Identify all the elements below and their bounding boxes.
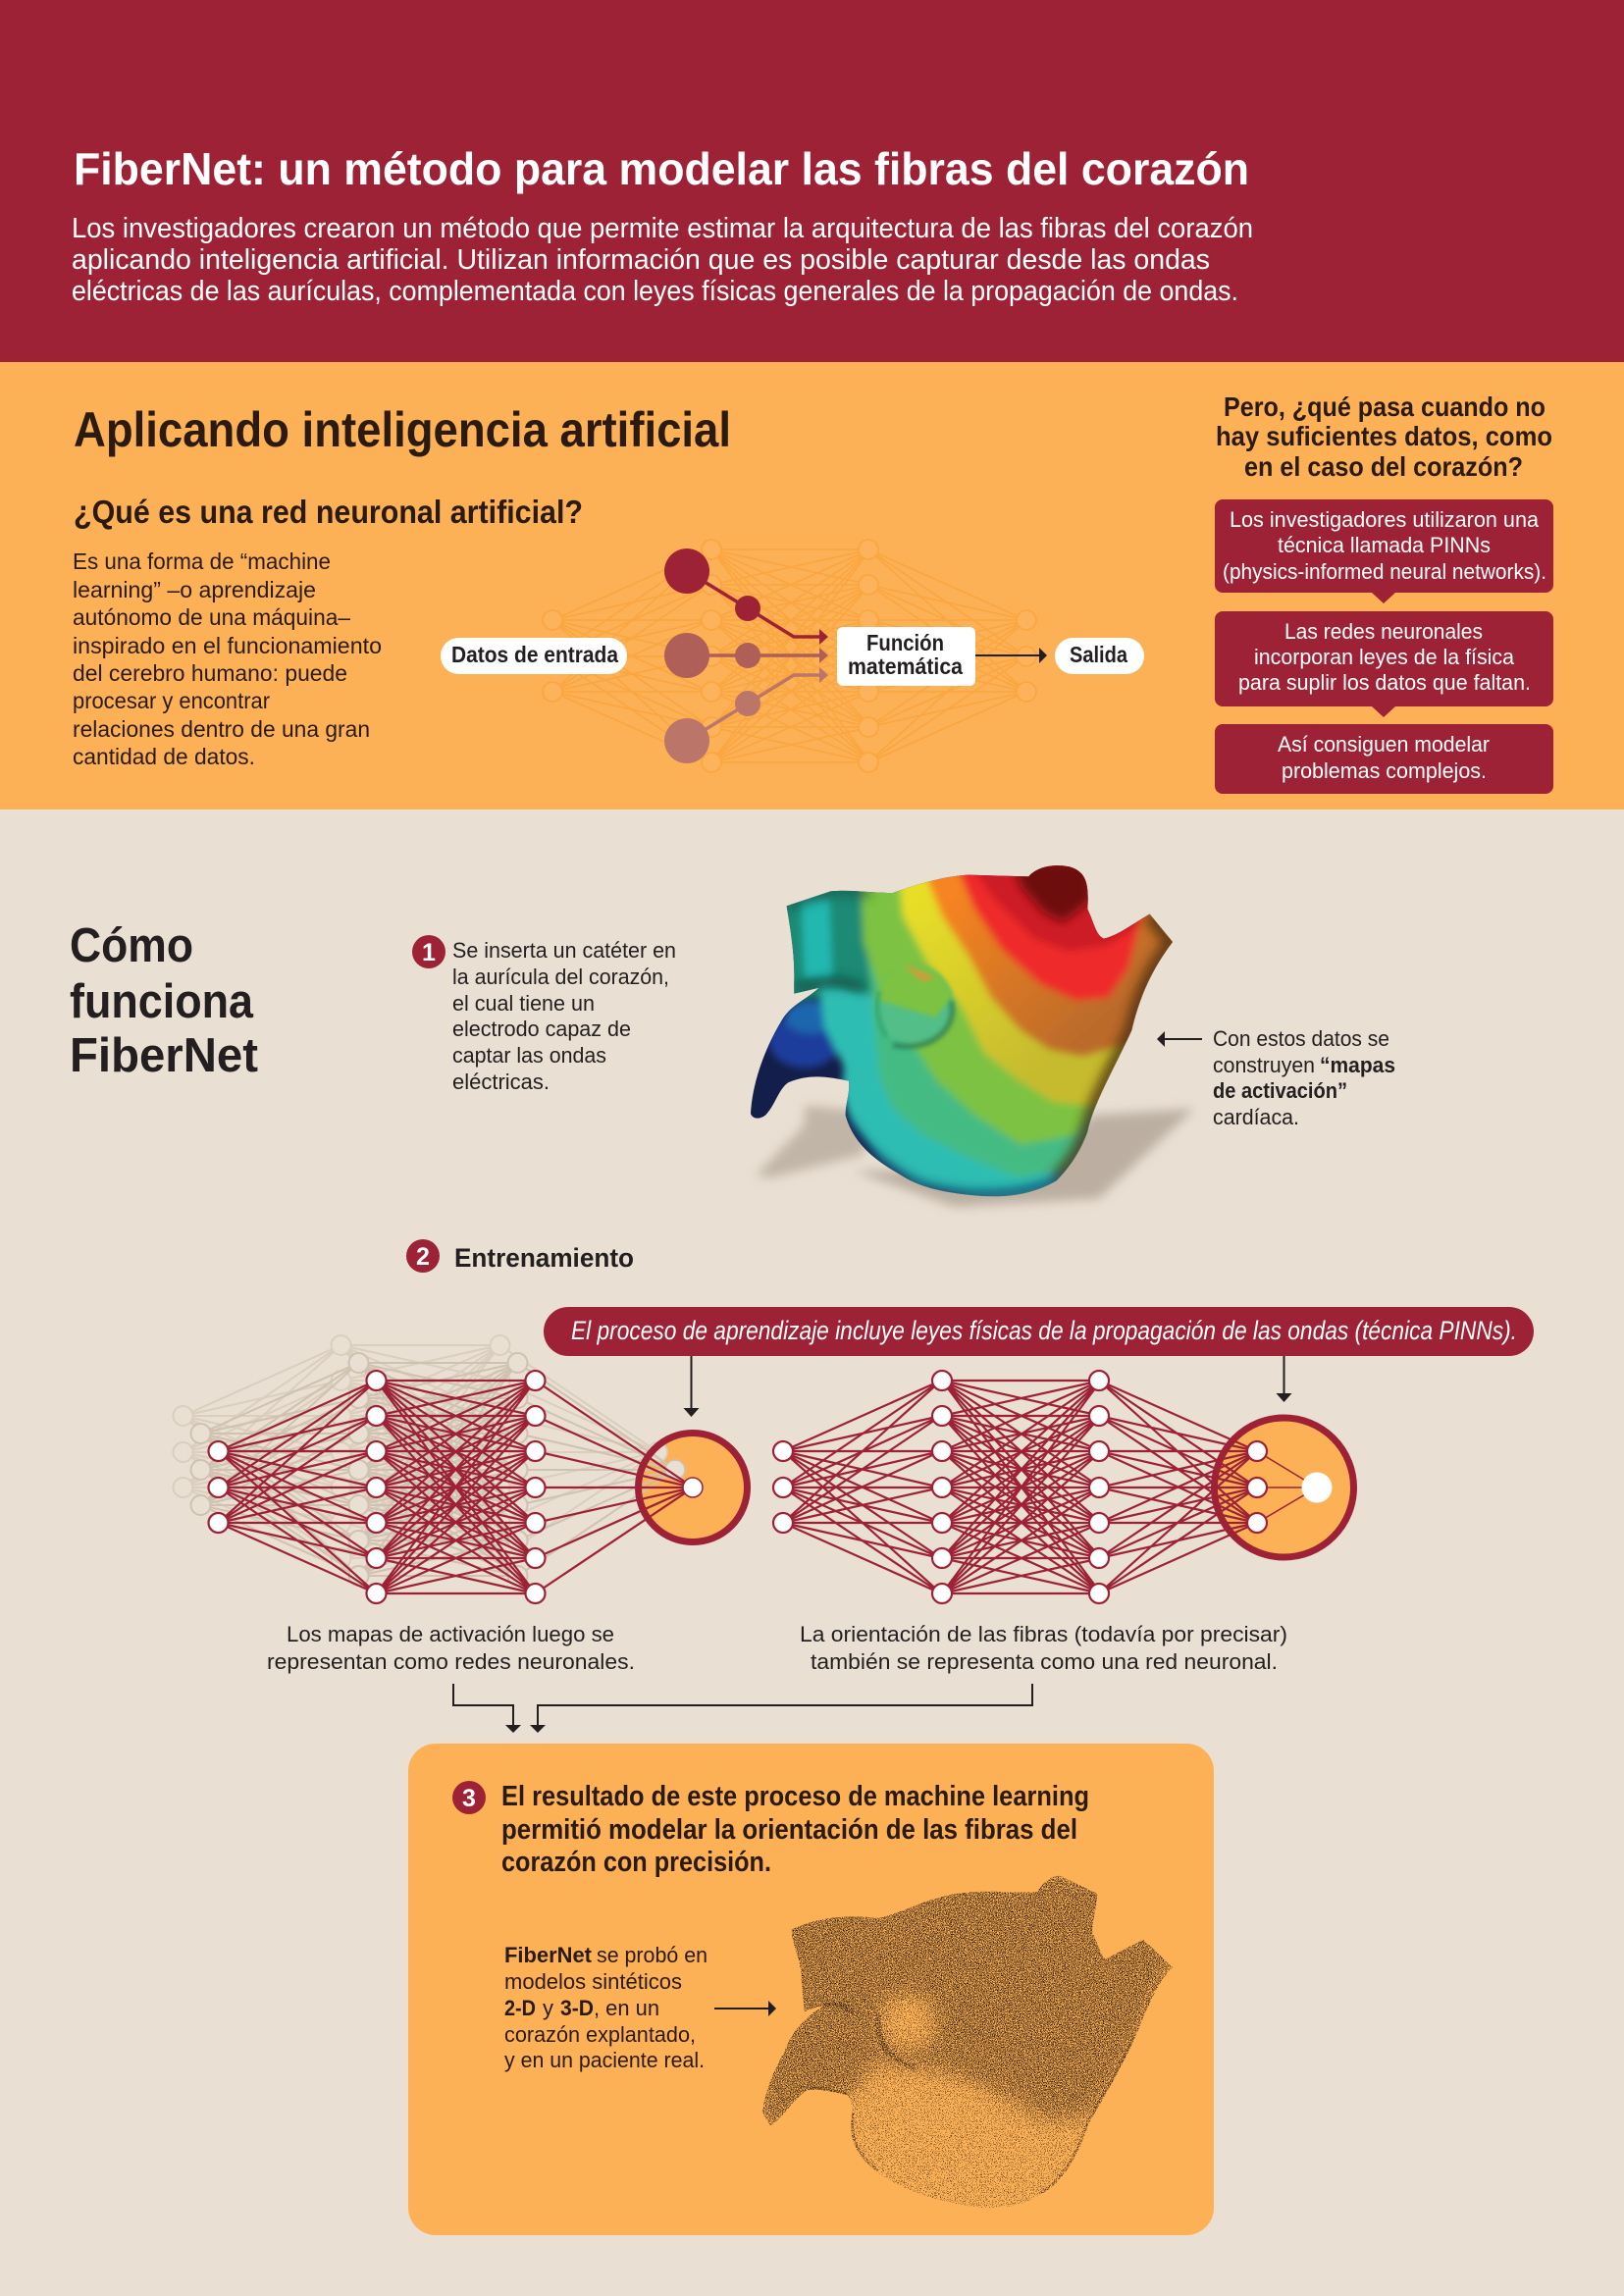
final node links [1257,1451,1317,1523]
label: Función matemática [837,627,975,686]
step 2 badge: 2 [416,1243,430,1271]
step 2 heading: Entrenamiento [454,1243,634,1273]
question heading: en el caso del corazón? [1244,451,1523,482]
label: Función matemática: matemática [848,653,963,679]
label: Función matemática: Función [866,630,944,655]
text: definition of neural network: autónomo de una máquina– [73,604,351,630]
highlighted signal path: top [664,548,828,645]
result side text: 2-D [504,1996,536,2020]
faint network [543,540,1036,772]
arrow: bubble to right circle [1276,1356,1291,1402]
result side text: modelos sintéticos [504,1969,682,1994]
intro text [72,213,1253,307]
step 1 text: la aurícula del corazón, [452,965,669,989]
step 1 text: captar las ondas [452,1043,606,1068]
image: activation map heart [739,844,1197,1210]
heading: Como funciona FiberNet: funciona [70,975,254,1028]
output circle [1215,1418,1354,1557]
panel: result [408,1744,1214,2235]
arrow: right caption to result [530,1684,1032,1733]
heading: Aplicando inteligencia artificial: Aplicando inteligencia artificial [74,402,731,457]
caption: right network: La orientación de las fibras (todavía por precisar) [800,1622,1287,1646]
result heading: permitió modelar la orientación de las fibras del [501,1814,1077,1846]
result side text: corazón explantado, [504,2022,696,2047]
panel: pero que pasa [1215,391,1553,794]
caption: left network: Los mapas de activación luego se [287,1622,614,1646]
label: Salida [1055,638,1144,674]
title: FiberNet: un método para modelar las fibras del corazón [74,143,1249,194]
text: mapas de activacion: cardíaca. [1213,1105,1299,1129]
highlighted signal path: bottom [664,667,828,763]
output node [683,1478,703,1497]
ghost output node far [648,1442,667,1462]
text: mapas de activacion: construyen [1213,1053,1315,1077]
ghost output node near [665,1460,685,1480]
arrow: to Salida [975,648,1047,663]
text: mapas de activacion: Con estos datos se [1213,1026,1389,1051]
step 1 text: eléctricas. [452,1070,550,1094]
intro text: Los investigadores crearon un método que permite estimar la arquitectura de las fibras del corazón [72,213,1253,244]
callout: proceso de aprendizaje [544,1307,1534,1356]
question heading: Pero, ¿qué pasa cuando no [1224,391,1545,422]
result side text: se probó en [597,1943,707,1967]
heading: Como funciona FiberNet: FiberNet [70,1029,258,1082]
background: orange band [0,362,1624,809]
label: Datos de entrada [441,638,627,674]
heart colour bands [751,865,1173,1197]
text: definition of neural network [73,548,382,769]
callout: problemas complejos: problemas complejos. [1282,758,1487,783]
text: definition of neural network: procesar y encontrar [73,688,270,713]
heart edge shading [787,891,1173,1195]
callout: PINNs: técnica llamada PINNs [1278,533,1491,557]
text: mapas de activacion: de activación” [1213,1078,1347,1103]
chart: neural network diagram on orange [441,540,1144,772]
step 1 text [452,938,676,1094]
heading: Como funciona FiberNet: Cómo [70,919,193,972]
caption: left network: representan como redes neuronales. [267,1649,635,1674]
caption: left network [267,1622,635,1674]
result heading: El resultado de este proceso de machine learning [501,1781,1089,1812]
callout: leyes de la fisica [1215,611,1553,717]
highlighted signal path: middle [664,633,828,678]
caption: right network [800,1622,1287,1674]
background: header band [0,0,1624,362]
result side text: , en un [594,1996,659,2020]
callout: PINNs: (physics-informed neural networks). [1223,559,1546,584]
heart shadow [756,1106,1194,1207]
arrow: bubble to left circle [683,1356,699,1417]
arrow: to map [1157,1031,1202,1047]
text: mapas de activacion [1213,1026,1395,1129]
atrial ring [875,965,953,1047]
text: definition of neural network: Es una forma de “machine [73,548,331,574]
step 3 badge [452,1781,486,1814]
step 1 text: el cual tiene un [452,991,595,1016]
step 1 badge: 1 [422,939,436,966]
result side text: y en un paciente real. [504,2048,705,2072]
final node [1301,1472,1333,1503]
step 2 badge [406,1239,440,1273]
text: definition of neural network: relaciones dentro de una gran [73,716,370,742]
text: definition of neural network: learning” –o aprendizaje [73,577,316,602]
text: mapas de activacion: “mapas [1320,1053,1395,1077]
heading: Como funciona FiberNet [70,919,258,1082]
callout: PINNs [1215,499,1553,603]
question heading [1216,391,1552,482]
output circle fill [638,1433,748,1542]
arrow: left caption to result [453,1684,521,1733]
result heading [501,1781,1089,1878]
result side text [504,1943,707,2072]
step 1 text: electrodo capaz de [452,1017,631,1041]
ghost network near [190,1353,675,1586]
text: definition of neural network: del cerebro humano: puede [73,660,347,686]
result side text: 3-D [560,1996,594,2020]
text: definition of neural network: inspirado en el funcionamiento [73,633,382,658]
intro text: eléctricas de las aurículas, complementada con leyes físicas generales de la propagación de ondas. [72,276,1238,307]
label: Datos de entrada: Datos de entrada [451,642,618,667]
callout: problemas complejos: Así consiguen modelar [1278,732,1490,757]
caption: right network: también se representa como una red neuronal. [811,1649,1278,1674]
chart: activation map networks (left) [173,1335,748,1603]
intro text: aplicando inteligencia artificial. Utilizan información que es posible capturar desde las ondas [72,244,1210,276]
question heading: hay suficientes datos, como [1216,421,1552,451]
arrow: to fiber heart [714,2001,776,2016]
result side text: y [543,1996,553,2020]
callout: PINNs: Los investigadores utilizaron una [1230,507,1539,532]
network lines [773,1371,1267,1603]
callout: problemas complejos [1215,724,1553,794]
main network [208,1371,693,1603]
text: definition of neural network: cantidad de datos. [73,744,255,769]
step 1 text: Se inserta un catéter en [452,938,676,963]
callout: leyes de la fisica: para suplir los datos que faltan. [1238,670,1531,695]
callout: leyes de la fisica: Las redes neuronales [1284,619,1483,644]
callout: leyes de la fisica: incorporan leyes de la física [1254,645,1514,669]
result heading: corazón con precisión. [501,1847,771,1878]
chart: fiber orientation network (right) [773,1371,1354,1603]
label: Salida: Salida [1070,642,1127,667]
background: beige section [0,809,1624,2296]
ghost network far [173,1335,657,1568]
subheading: red neuronal: ¿Qué es una red neuronal artificial? [74,494,583,530]
step 1 badge [412,935,445,968]
step 3 badge: 3 [462,1785,476,1812]
image: stippled fiber heart [759,1871,1178,2195]
dark red bump [1014,861,1092,922]
output circle ring [638,1433,748,1542]
result side text: FiberNet [504,1943,593,1967]
